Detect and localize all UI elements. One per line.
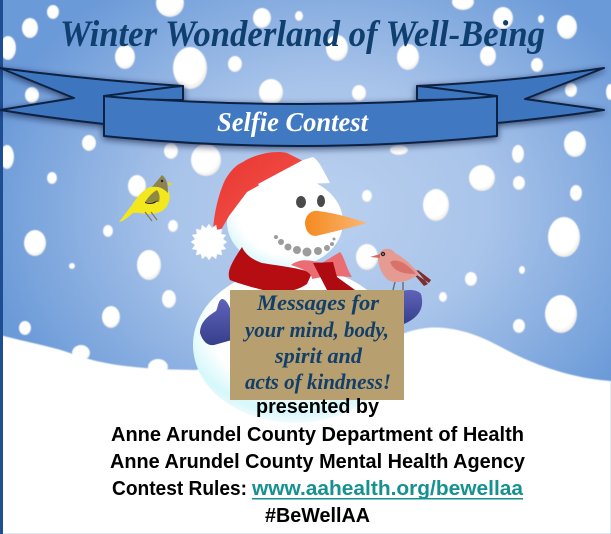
ribbon centre band (104, 96, 497, 146)
snow hill (0, 328, 611, 534)
banner ribbon (0, 68, 604, 146)
scarf (229, 247, 312, 292)
eyes (296, 195, 325, 208)
title: Winter Wonderland of Well-Being (60, 14, 545, 55)
right mitten (402, 290, 422, 324)
presenter information (110, 396, 526, 527)
sign board (230, 290, 404, 400)
ribbon fold right (417, 86, 497, 100)
hat brim (258, 157, 330, 190)
cardboard sign (230, 290, 404, 400)
sign message: your mind, body, (242, 317, 389, 342)
ribbon subtitle: Selfie Contest (217, 107, 369, 137)
sign message: acts of kindness! (245, 369, 391, 394)
icon: yellow bird (119, 175, 173, 222)
rules link: www.aahealth.org/bewellaa (251, 478, 524, 500)
snowman head (227, 176, 343, 268)
hashtag: #BeWellAA (265, 505, 370, 527)
pom-pom (191, 224, 227, 260)
left mitten (200, 299, 232, 345)
health department: Anne Arundel County Department of Health (111, 424, 524, 446)
contest rules: Contest Rules: (112, 478, 247, 500)
snowman body (193, 267, 397, 423)
scarf tail (313, 262, 355, 290)
sign message: Messages for (256, 290, 379, 315)
ribbon right tail (417, 68, 604, 123)
mental health agency: Anne Arundel County Mental Health Agency (110, 451, 526, 473)
left edge strip (0, 0, 3, 534)
hat (213, 152, 303, 230)
sign message: spirit and (274, 343, 363, 368)
smile (274, 235, 336, 256)
falling snowballs (0, 0, 611, 375)
ribbon left tail (0, 68, 183, 124)
presented by: presented by (256, 396, 380, 418)
carrot nose (305, 211, 367, 236)
ribbon fold left (104, 86, 183, 100)
scarf bow (291, 252, 352, 279)
icon: pink bird (370, 249, 431, 290)
snowman (191, 152, 422, 423)
sign message (242, 290, 391, 394)
